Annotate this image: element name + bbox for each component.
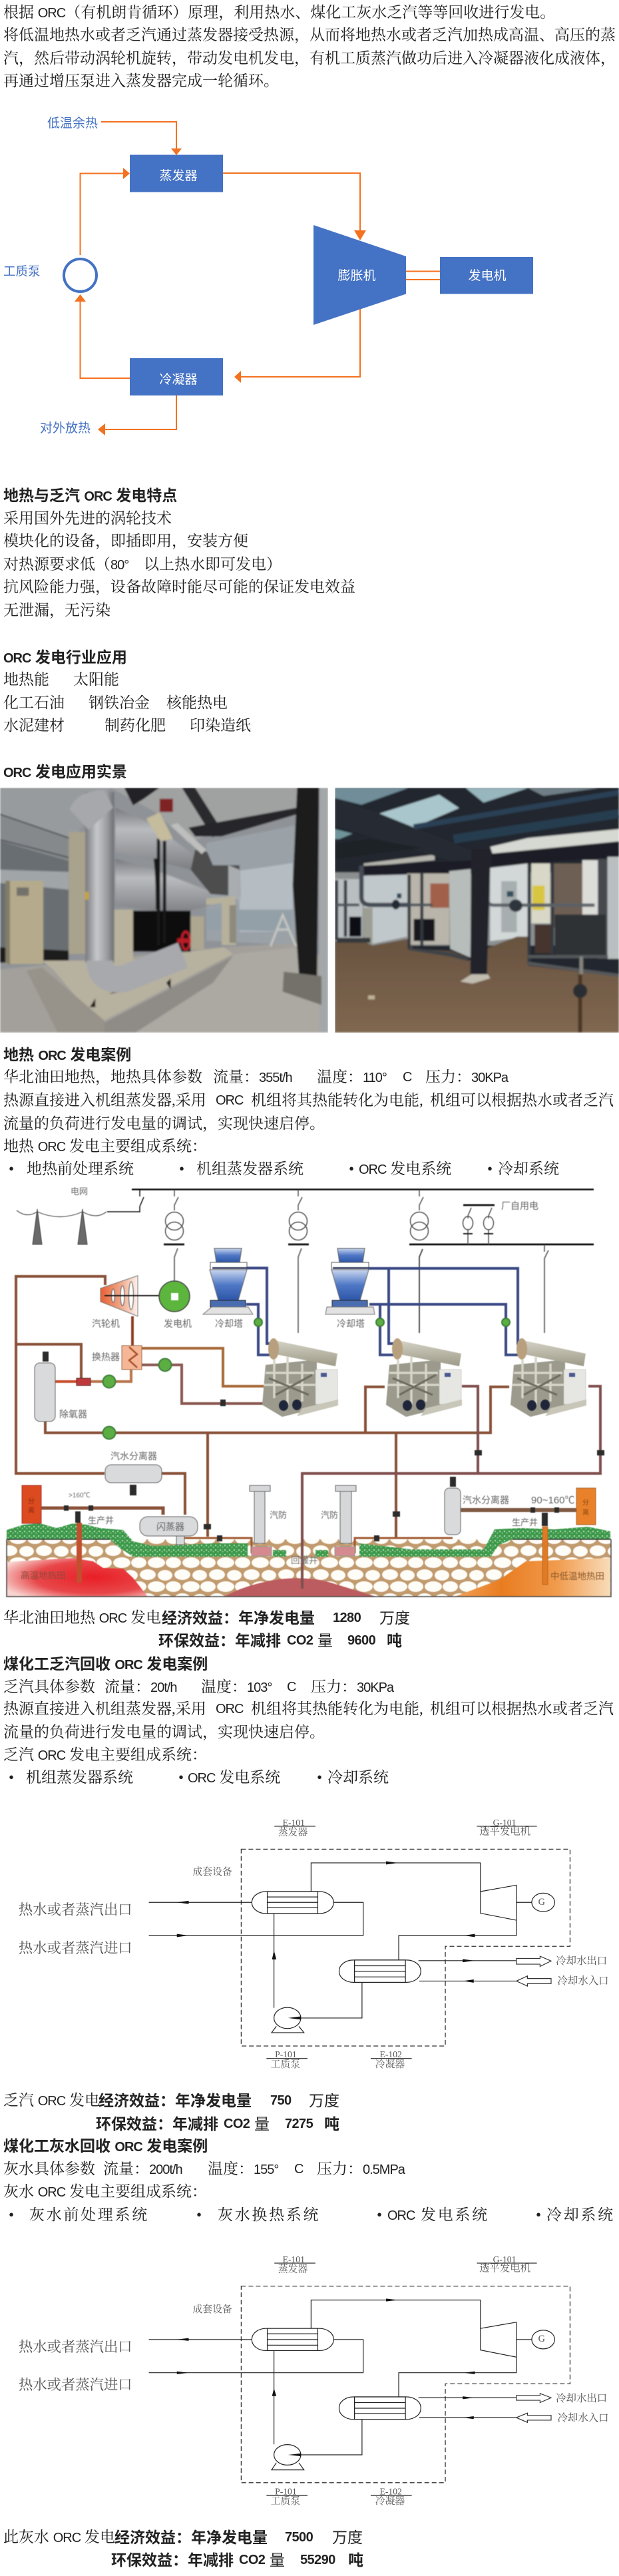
geothermal benefit: 经济效益：年净发电量 [162,1609,315,1627]
intro paragraph: 根据 ORC（有机朗肯循环）原理，利用热水、煤化工灰水乏汽等等回收进行发电。 [3,4,555,21]
grey water benefit: 量 [270,2551,285,2569]
cooling water inlet arrow [516,1976,551,1986]
turbine and generator G-101 [481,1886,554,1920]
diagram labels: G-101 [493,1818,516,1828]
cooling tower 2 [325,1248,375,1329]
coal chemical exhaust steam case intro: 煤化工乏汽回收 ORC 发电案例 [3,1655,208,1673]
steam turbine and generator: 汽轮机 [92,1318,120,1329]
geothermal case intro: 地热 ORC 发电案例 [3,1046,131,1063]
diagram labels: 冷凝器 [375,2495,405,2507]
industry applications section: 制药化肥 [104,717,166,734]
generator block: 发电机 [468,268,507,283]
arrow: low-temperature heat in [101,122,182,155]
geothermal case intro: ORC [216,1093,243,1108]
evaporator E-101 [252,2328,333,2351]
photo: silver ORC unit in plant room [0,788,328,1033]
cooling water outlet arrow [516,2394,551,2403]
arrow: pump to evaporator [80,168,130,255]
diagram labels: 冷却水入口 [558,1975,609,1987]
coal chemical exhaust steam case intro: 热源直接进入机组蒸发器,采用 [3,1700,206,1717]
diagram labels: 成套设备 [192,2304,232,2315]
geothermal case intro: 机组蒸发器系统 [196,1160,304,1177]
industry applications section: 太阳能 [73,671,119,688]
expander [313,225,406,325]
turbine and generator G-101: G [538,1897,545,1908]
arrow: evaporator to expander [223,173,366,240]
coal chemical exhaust steam case intro [3,1655,614,1786]
industry applications section: 化工石油 [3,694,65,711]
coal chemical exhaust steam case intro: 冷却系统 [327,1769,389,1786]
label: heat rejection: 对外放热 [40,421,91,435]
shaft coupling [406,272,440,280]
valves [43,1352,604,1541]
separator boxes and production wells [22,1485,596,1585]
brown working fluid and brine pipes [16,1276,600,1589]
geothermal case intro: ORC 发电系统 [359,1160,451,1177]
separator boxes and production wells: 90~160℃ [531,1495,574,1506]
exhaust steam benefit: 万度 [309,2092,339,2109]
separator boxes and production wells: 生产井 [88,1515,114,1525]
coal chemical grey water case intro: 冷却系统 [546,2206,615,2223]
geothermal benefit: 1280 [333,1611,361,1625]
coal chemical exhaust steam case intro: 机组蒸发器系统 [26,1769,133,1786]
grey water benefit: 55290 [300,2553,335,2567]
turbine and generator G-101 [481,2322,554,2357]
diagram labels: 工质泵 [271,2495,300,2507]
condenser block [130,358,223,395]
separators and flash vessel: 汽水分离器 [110,1451,157,1461]
geothermal case intro: 华北油田地热，地热具体参数 [3,1069,202,1085]
diagram labels: 工质泵 [271,2059,300,2070]
coal chemical grey water case intro: • [196,2206,204,2223]
diagram labels: E-101 [283,2254,305,2264]
separators and flash vessel: 闪蒸器 [156,1521,184,1532]
geothermal case intro: 热源直接进入机组蒸发器,采用 [3,1092,206,1109]
coal chemical grey water case intro: 流量：200t/h [103,2161,182,2177]
cooling water inlet arrow [516,2413,551,2423]
geothermal benefit: 环保效益：年减排 [158,1632,281,1649]
ORC unit 2 [386,1338,462,1417]
features section: 地热与乏汽 ORC 发电特点 [3,487,177,504]
ORC cycle diagram [3,116,533,435]
grey water benefit: 经济效益：年净发电量 [114,2529,268,2546]
geothermal case intro: • [349,1160,354,1177]
features section: 抗风险能力强，设备故障时能尽可能的保证发电效益 [3,579,355,595]
separator boxes and production wells: 分 [28,1497,35,1505]
coal chemical exhaust steam case intro: • [178,1769,184,1786]
geothermal case intro: 流量：355t/h [213,1069,292,1085]
exhaust steam benefit: CO2 [224,2117,250,2131]
ground layers [7,1523,611,1597]
pump P-101 [272,2007,304,2033]
coal chemical exhaust steam case intro: ORC [216,1702,243,1716]
separator boxes and production wells: 分 [582,1499,589,1507]
transformers and switchgear: 厂自用电 [501,1200,538,1211]
arrow: heat rejection [98,395,176,435]
geothermal case intro: 温度：110° [317,1069,387,1085]
condenser block: 冷凝器 [159,372,198,387]
grey water benefit [3,2529,363,2569]
cooling tower 1 [203,1248,253,1329]
turbine and generator G-101: G [538,2334,545,2344]
separator boxes and production wells: 生产井 [512,1517,538,1527]
diagram labels: 热水或者蒸汽进口 [19,1940,132,1956]
features section [3,487,355,619]
geothermal benefit: 9600 [347,1633,375,1648]
power grid and transmission towers: 电网 [71,1186,88,1196]
separators and flash vessel: 汽水分离器 [463,1495,509,1505]
diagram labels: 冷凝器 [375,2059,405,2070]
deaerator [35,1363,91,1421]
industry applications section: 地热能 [3,671,49,688]
geothermal case intro [3,1046,614,1177]
arrow: condenser to pump [75,294,130,378]
coal chemical exhaust steam case intro: 机组将其热能转化为电能, [251,1700,423,1717]
heading: site photos: ORC 发电应用实景 [3,763,127,780]
diagram labels: P-101 [275,2487,297,2497]
process piping [149,2263,537,2495]
exhaust steam benefit: 环保效益：年减排 [96,2115,218,2133]
coal chemical grey water case intro: ORC [387,2208,415,2223]
coal chemical grey water case intro: 发电系统 [421,2206,489,2223]
package boundary [241,1850,570,2046]
expander: 膨胀机 [337,268,376,283]
grey water benefit: 万度 [332,2529,363,2546]
exhaust steam process diagram [19,1818,609,2070]
features section: 对热源要求低（80° [3,556,128,573]
diagram labels: E-102 [380,2487,402,2497]
coal chemical grey water case intro: 灰水换热系统 [218,2206,320,2223]
diagram labels: P-101 [275,2049,297,2059]
coal chemical exhaust steam case intro: C [287,1680,296,1694]
industry applications section: ORC 发电行业应用 [3,648,127,666]
industry applications section: 印染造纸 [190,717,251,734]
diagram labels: 热水或者蒸汽出口 [19,2339,132,2355]
reservoir labels: 中低温地热田 [550,1571,604,1581]
grey water benefit: 吨 [348,2551,363,2569]
separator boxes and production wells: >160℃ [69,1492,91,1499]
exhaust steam benefit: 7275 [285,2117,313,2131]
coal chemical grey water case intro: 灰水 ORC 发电主要组成系统： [3,2183,207,2200]
geothermal case intro: 流量的负荷进行发电量的调试，实现快速启停。 [3,1115,325,1132]
exhaust steam benefit: 乏汽 ORC 发电 [3,2092,100,2109]
green pumps [103,1318,510,1439]
industry applications section [3,648,251,734]
intro paragraph: 再通过增压泵进入蒸发器完成一轮循环。 [3,73,279,89]
pump P-101 [272,2445,304,2470]
evaporator block [130,154,223,192]
coal chemical grey water case intro: 灰水前处理系统 [29,2206,149,2223]
diagram labels: 热水或者蒸汽出口 [19,1902,132,1918]
coal chemical exhaust steam case intro: 温度：103° [201,1678,272,1695]
grey water process diagram [19,2254,609,2507]
geothermal benefit: CO2 [287,1633,313,1648]
features section: 模块化的设备，即插即用，安装方便 [3,533,248,549]
working fluid pump [64,259,97,292]
coal chemical grey water case intro: 温度：155° [208,2161,278,2177]
exhaust steam benefit: 750 [270,2093,292,2108]
industry applications section: 核能热电 [166,694,228,711]
deaerator: 除氧器 [59,1409,87,1419]
separator boxes and production wells: 离 [28,1506,35,1515]
coal chemical exhaust steam case intro: 乏汽 ORC 发电主要组成系统： [3,1746,207,1763]
coal chemical exhaust steam case intro: 流量的负荷进行发电量的调试，实现快速启停。 [3,1724,325,1740]
coal chemical grey water case intro: • [536,2206,543,2223]
geothermal case intro: 机组将其热能转化为电能, [251,1092,423,1109]
flow arrows [177,1862,475,2020]
geothermal benefit [3,1609,410,1649]
coal chemical exhaust steam case intro: 流量：20t/h [104,1678,176,1695]
geothermal case intro: • [9,1160,14,1177]
diagram labels: 透平发电机 [479,2262,530,2274]
heat exchanger [92,1346,142,1370]
diagram labels: E-102 [380,2049,402,2059]
geothermal benefit: 华北油田地热 ORC 发电 [3,1609,161,1626]
coal chemical grey water case intro: • [377,2206,384,2223]
coal chemical exhaust steam case intro: ORC 发电系统 [188,1769,280,1786]
diagram labels: 蒸发器 [278,2262,308,2274]
flow arrows [177,2299,475,2456]
exhaust steam benefit [3,2092,339,2133]
cooling water piping [213,1268,522,1355]
cooling tower 1: 冷却塔 [215,1318,243,1329]
transformers and switchgear [164,1190,594,1333]
ORC unit 3 [511,1338,586,1417]
coal chemical exhaust steam case intro: • [317,1769,322,1786]
steam stacks: 汽防 [321,1510,338,1520]
features section: 以上热水即可发电） [144,556,282,573]
grey water benefit: CO2 [239,2553,265,2567]
exhaust steam benefit: 吨 [324,2115,339,2133]
grey water benefit: 此灰水 ORC 发电 [3,2529,115,2545]
diagram labels: 热水或者蒸汽进口 [19,2377,132,2393]
coal chemical grey water case intro: 压力：0.5MPa [317,2161,405,2177]
intro paragraph [3,4,616,89]
geothermal benefit: 吨 [387,1632,402,1649]
geothermal benefit: 量 [317,1632,333,1649]
diagram labels: 蒸发器 [278,1826,308,1838]
package boundary [241,2286,570,2483]
coal chemical grey water case intro: • [9,2206,16,2223]
ORC unit 1 [262,1338,338,1417]
evaporator block: 蒸发器 [159,168,198,183]
geothermal case intro: 机组可以根据热水或者乏汽 [430,1092,614,1109]
steam turbine and generator: 发电机 [164,1318,192,1329]
industry applications section: 钢铁冶金 [89,694,150,711]
reservoir labels [21,1555,604,1581]
geothermal case intro: 冷却系统 [498,1160,559,1177]
geothermal case intro: 地热前处理系统 [27,1160,134,1177]
steam turbine and generator [92,1276,192,1329]
intro paragraph: 汽，然后带动涡轮机旋转，带动发电机发电，有机工质蒸汽做功后进入冷凝器液化成液体， [3,50,616,67]
coal chemical grey water case intro: 灰水具体参数 [3,2161,95,2177]
condenser E-102 [339,1960,421,1983]
power grid and transmission towers [17,1186,594,1244]
process piping [149,1826,537,2059]
reservoir labels: 回灌井 [291,1555,318,1565]
cooling tower 2: 冷却塔 [337,1318,365,1329]
geothermal case intro: • [487,1160,493,1177]
coal chemical exhaust steam case intro: 乏汽具体参数 [3,1678,95,1695]
geothermal case intro: C [403,1070,411,1085]
diagram labels [19,1818,609,2070]
geothermal power plant schematic [5,1186,612,1598]
coal chemical exhaust steam case intro: 机组可以根据热水或者乏汽 [430,1700,614,1717]
exhaust steam benefit: 经济效益：年净发电量 [99,2092,252,2109]
label: low-temperature heat: 低温余热 [47,116,98,130]
diagram labels: 冷却水入口 [558,2412,609,2424]
reservoir labels: 高温地热田 [21,1570,65,1581]
exhaust steam benefit: 量 [254,2115,270,2133]
photo: geothermal plant units under steel frame [335,788,619,1033]
separators and flash vessel [105,1451,509,1545]
diagram labels: E-101 [283,1818,305,1828]
arrow: expander to condenser [234,309,360,383]
coal chemical grey water case intro [3,2137,615,2223]
label: working fluid pump: 工质泵 [3,264,41,278]
condenser E-102 [339,2397,421,2420]
coal chemical grey water case intro: 煤化工灰水回收 ORC 发电案例 [3,2137,208,2155]
diagram labels: 冷却水出口 [556,1955,607,1967]
heat exchanger: 换热器 [92,1352,120,1362]
diagram labels: 透平发电机 [479,1826,530,1838]
grey water benefit: 环保效益：年减排 [111,2551,234,2569]
features section: 无泄漏，无污染 [3,602,110,619]
geothermal case intro: 地热 ORC 发电主要组成系统： [3,1138,207,1155]
geothermal case intro: 压力：30KPa [425,1069,508,1085]
steam stacks: 汽防 [270,1510,287,1520]
generator block [440,257,533,294]
coal chemical grey water case intro: C [294,2162,303,2177]
evaporator E-101 [252,1892,333,1914]
grey water benefit: 7500 [285,2530,313,2545]
diagram labels: G-101 [493,2254,516,2264]
steam stacks [250,1485,356,1556]
features section: 采用国外先进的涡轮技术 [3,510,172,527]
diagram labels [19,2254,609,2507]
coal chemical exhaust steam case intro: 压力：30KPa [311,1678,393,1695]
separator boxes and production wells: 离 [582,1508,589,1517]
industry applications section: 水泥建材 [3,717,65,734]
coal chemical exhaust steam case intro: • [9,1769,14,1786]
geothermal benefit: 万度 [379,1609,410,1627]
intro paragraph: 将低温地热水或者乏汽通过蒸发器接受热源，从而将地热水或者乏汽加热成高温、高压的蒸 [3,27,616,43]
diagram labels: 冷却水出口 [556,2392,607,2404]
geothermal case intro: • [179,1160,184,1177]
cooling water outlet arrow [516,1956,551,1967]
diagram labels: 成套设备 [192,1866,232,1878]
